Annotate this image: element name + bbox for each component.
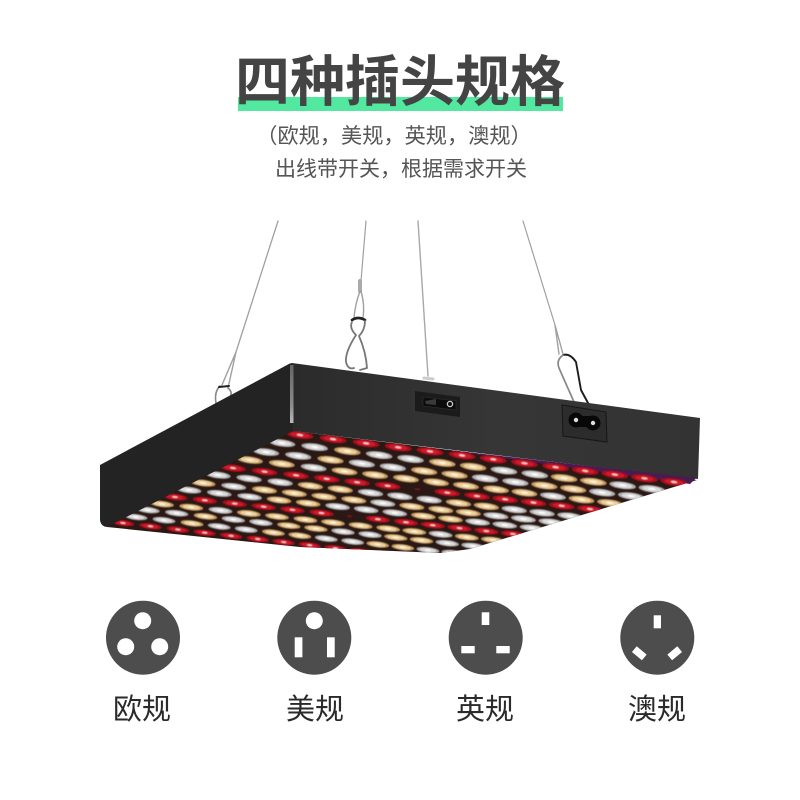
LED panel underside [107,431,697,553]
label: UK: 英规 [456,694,514,726]
icon: AU plug [620,601,694,675]
icon: EU plug [106,601,180,675]
icon: US plug [277,601,351,675]
wire: centre power cord [418,221,433,379]
housing: corner highlight [290,365,294,423]
hanging wires and carabiner hooks [216,221,588,403]
product illustration: hanging LED grow light [100,220,700,553]
wire: back left [216,221,278,403]
label: US: 美规 [286,694,344,726]
title: 四种插头规格 [235,51,565,113]
power socket [562,405,607,442]
label: EU: 欧规 [113,694,171,726]
housing: left side face [100,363,296,527]
wire: centre left with hook [346,221,367,370]
wire: right with hook [523,221,588,403]
LED array [112,430,687,564]
housing: front face [292,363,700,479]
rocker switch [415,391,460,417]
lamp housing [100,363,700,564]
subtitle: plug standards: （欧规，美规，英规，澳规） [256,125,532,148]
title highlight bar [238,97,563,111]
purple glow strip [440,449,696,484]
icon: UK plug [449,601,523,675]
label: AU: 澳规 [628,694,686,726]
subtitle: switch note: 出线带开关，根据需求开关 [275,158,527,181]
